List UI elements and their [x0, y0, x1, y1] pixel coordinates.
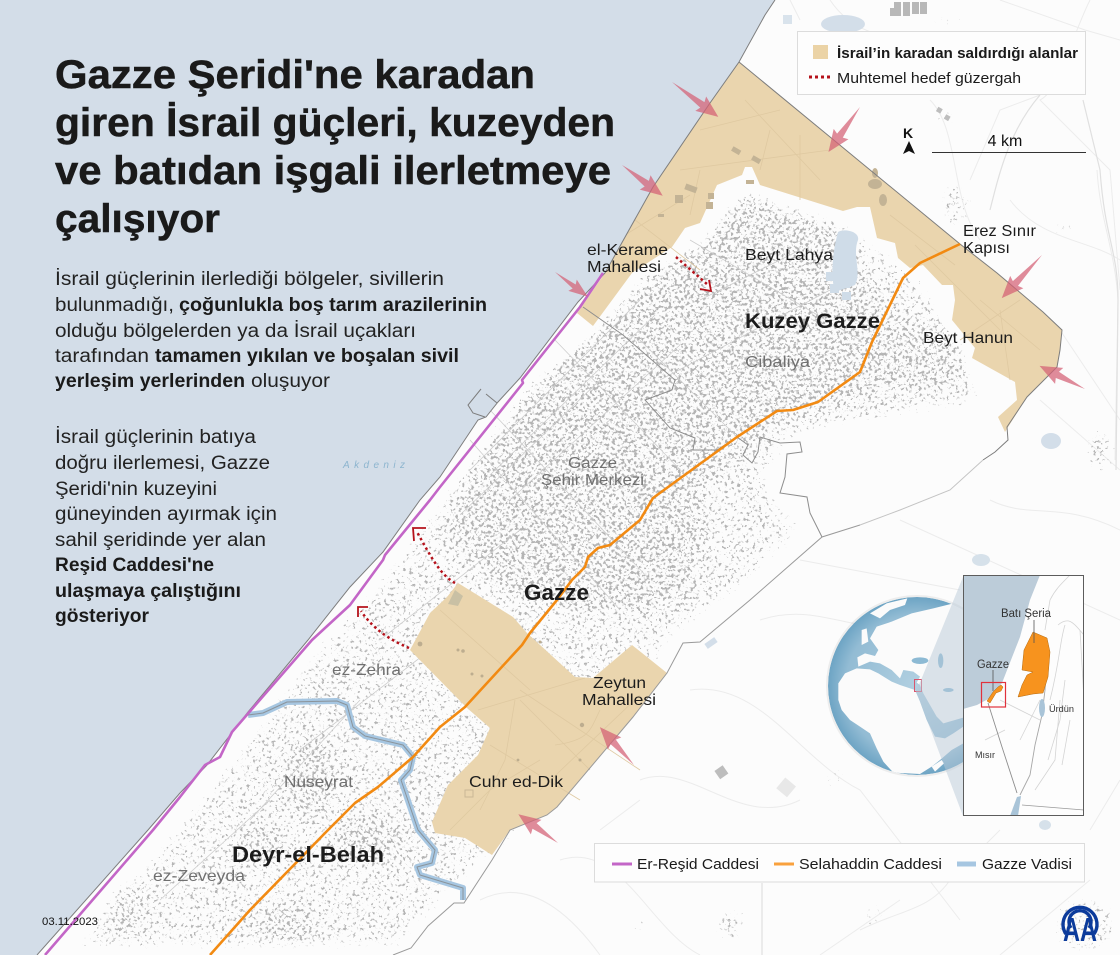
label: Deyr-el-Belah: Deyr-el-Belah [232, 842, 384, 867]
label: Cibaliya: Cibaliya [745, 354, 810, 371]
route: Gazze north-west [413, 528, 455, 583]
label: Mısır: Mısır [975, 750, 995, 761]
legend item: Selahaddin: Selahaddin Caddesi [799, 856, 942, 873]
label: Zeytun Mahallesi: Mahallesi [582, 692, 656, 709]
label: el-Kerame Mahallesi: Mahallesi [587, 259, 661, 276]
ponds and buildings [704, 2, 1061, 830]
paragraph 1: oluşuyor [251, 371, 331, 392]
legend item: Er-Reşid: Er-Reşid Caddesi [637, 856, 759, 873]
wadi: Gazze Vadisi [248, 701, 463, 900]
inset map [963, 575, 1084, 816]
label: Erez Sınır Kapısı: Erez Sınır [963, 223, 1037, 240]
north indicator: K [903, 125, 913, 141]
logo: AA: AA [1063, 911, 1097, 948]
paragraph 1: İsrail güçlerinin ilerlediği bölgeler, sivillerin [55, 269, 444, 290]
legend text: route: Muhtemel hedef güzergah [837, 70, 1021, 87]
legend: bottom [594, 844, 1084, 882]
paragraph 1: tamamen yıkılan ve boşalan sivil [155, 346, 459, 367]
paragraph 2: sahil şeridinde yer alan [55, 530, 266, 551]
area: southern ground attack zone [410, 583, 667, 855]
paragraph 2 [55, 427, 277, 627]
arrow 6 [1035, 358, 1089, 397]
arrow 4 [551, 266, 592, 302]
Gaza Strip [987, 685, 1003, 703]
label: el-Kerame Mahallesi: el-Kerame [587, 242, 668, 259]
zoom beam [916, 577, 963, 816]
legend: top [798, 32, 1086, 94]
inset sea [963, 575, 1040, 709]
legend item: Gazze Vadisi: Gazze Vadisi [982, 856, 1072, 873]
label: Batı Şeria: Batı Şeria [1001, 608, 1052, 620]
paragraph 2: doğru ilerlemesi, Gazze [55, 453, 270, 474]
land: Greenland [870, 598, 907, 618]
road: Selahaddin Caddesi [210, 244, 960, 955]
label: Gazze: Gazze [524, 580, 589, 605]
paragraph 1: yerleşim yerlerinden [55, 371, 245, 392]
city streets [160, 240, 860, 900]
paragraph 1: bulunmadığı, [55, 295, 174, 316]
paragraph 2: güneyinden ayırmak için [55, 504, 277, 525]
sea: Black Sea [912, 657, 928, 664]
sea: Caspian [938, 653, 943, 668]
Gulf of Aqaba [1010, 796, 1021, 816]
label: ez-Zehra: ez-Zehra [332, 662, 401, 679]
title: Gazze Şeridi'ne karadan [55, 53, 535, 97]
label: Akdeniz: Akdeniz [342, 460, 405, 471]
label: Cuhr ed-Dik: Cuhr ed-Dik [469, 774, 564, 791]
sea [0, 0, 775, 955]
label: Nuseyrat: Nuseyrat [284, 774, 354, 791]
probable target routes [358, 257, 711, 648]
land: Africa [838, 668, 963, 774]
paragraph 1 [55, 269, 487, 392]
label: Zeytun Mahallesi: Zeytun [593, 675, 646, 692]
label: Beyt Hanun: Beyt Hanun [923, 330, 1013, 347]
logo: AA [1063, 907, 1097, 948]
route: Gazze west [358, 607, 409, 648]
paragraph 2: ulaşmaya çalıştığını [55, 581, 241, 602]
road: Er-Reşid Caddesi [45, 273, 603, 955]
arrow 1 [667, 75, 724, 124]
paragraph 1: çoğunlukla boş tarım arazilerinin [179, 295, 487, 316]
label: inset Gazze: Gazze [977, 659, 1009, 671]
locator rectangle [914, 680, 922, 692]
label: Gazze Şehir Merkezi: Şehir Merkezi [541, 472, 644, 489]
land: Eurasia [857, 603, 967, 723]
swatch: attack area [813, 45, 828, 59]
inset terrain and borders [985, 575, 1084, 790]
leader lines [993, 620, 1034, 691]
label: Erez Sınır Kapısı [963, 223, 1037, 257]
area: northern ground attack zone [577, 62, 1062, 432]
legend text: attack area: İsrail’in karadan saldırdığı alanlar [837, 45, 1078, 62]
title: ve batıdan işgali ilerletmeye [55, 149, 611, 193]
paragraph 2: İsrail güçlerinin batıya [55, 427, 256, 448]
sea: Persian Gulf [943, 688, 954, 692]
Dead Sea [1039, 699, 1045, 717]
paragraph 2: gösteriyor [55, 606, 150, 627]
land: Madagascar [932, 760, 944, 772]
scale bar: 4 km [988, 133, 1022, 150]
arrow 2 [617, 158, 668, 203]
label: Erez Sınır Kapısı: Kapısı [963, 240, 1010, 257]
arrow 7 [593, 721, 641, 771]
label: Ürdün: Ürdün [1049, 704, 1074, 715]
label: el-Kerame Mahallesi [587, 242, 668, 276]
paragraph 2: Reşid Caddesi'ne [55, 555, 214, 576]
north indicator [903, 125, 915, 154]
route: el-Kerame [676, 257, 711, 291]
title [55, 53, 615, 241]
label: Gazze Şehir Merkezi [541, 455, 644, 489]
label: Zeytun Mahallesi [582, 675, 656, 709]
paragraph 2: Şeridi'nin kuzeyini [55, 479, 217, 500]
West Bank [1018, 632, 1050, 697]
label: Kuzey Gazze: Kuzey Gazze [745, 310, 880, 333]
label: ez-Zeveyda: ez-Zeveyda [153, 868, 245, 885]
label: Beyt Lahya: Beyt Lahya [745, 247, 833, 264]
date: 03.11.2023 [42, 916, 98, 928]
title: çalışıyor [55, 197, 220, 241]
red locator square [982, 682, 1006, 707]
paragraph 1: tarafından [55, 346, 149, 367]
arrow 3 [821, 102, 867, 157]
attack arrows [513, 75, 1089, 850]
globe locator [826, 595, 963, 777]
arrow 5 [995, 249, 1049, 304]
land: Britain [862, 628, 868, 645]
map place labels [153, 223, 1037, 885]
arrow 8 [513, 807, 563, 850]
title: giren İsrail güçleri, kuzeyden [55, 101, 615, 145]
swatch: dotted route [809, 76, 832, 78]
paragraph 1: olduğu bölgelerden ya da İsrail uçakları [55, 321, 416, 342]
faint roads on land [480, 0, 1120, 955]
label: Gazze Şehir Merkezi: Gazze [568, 455, 617, 472]
